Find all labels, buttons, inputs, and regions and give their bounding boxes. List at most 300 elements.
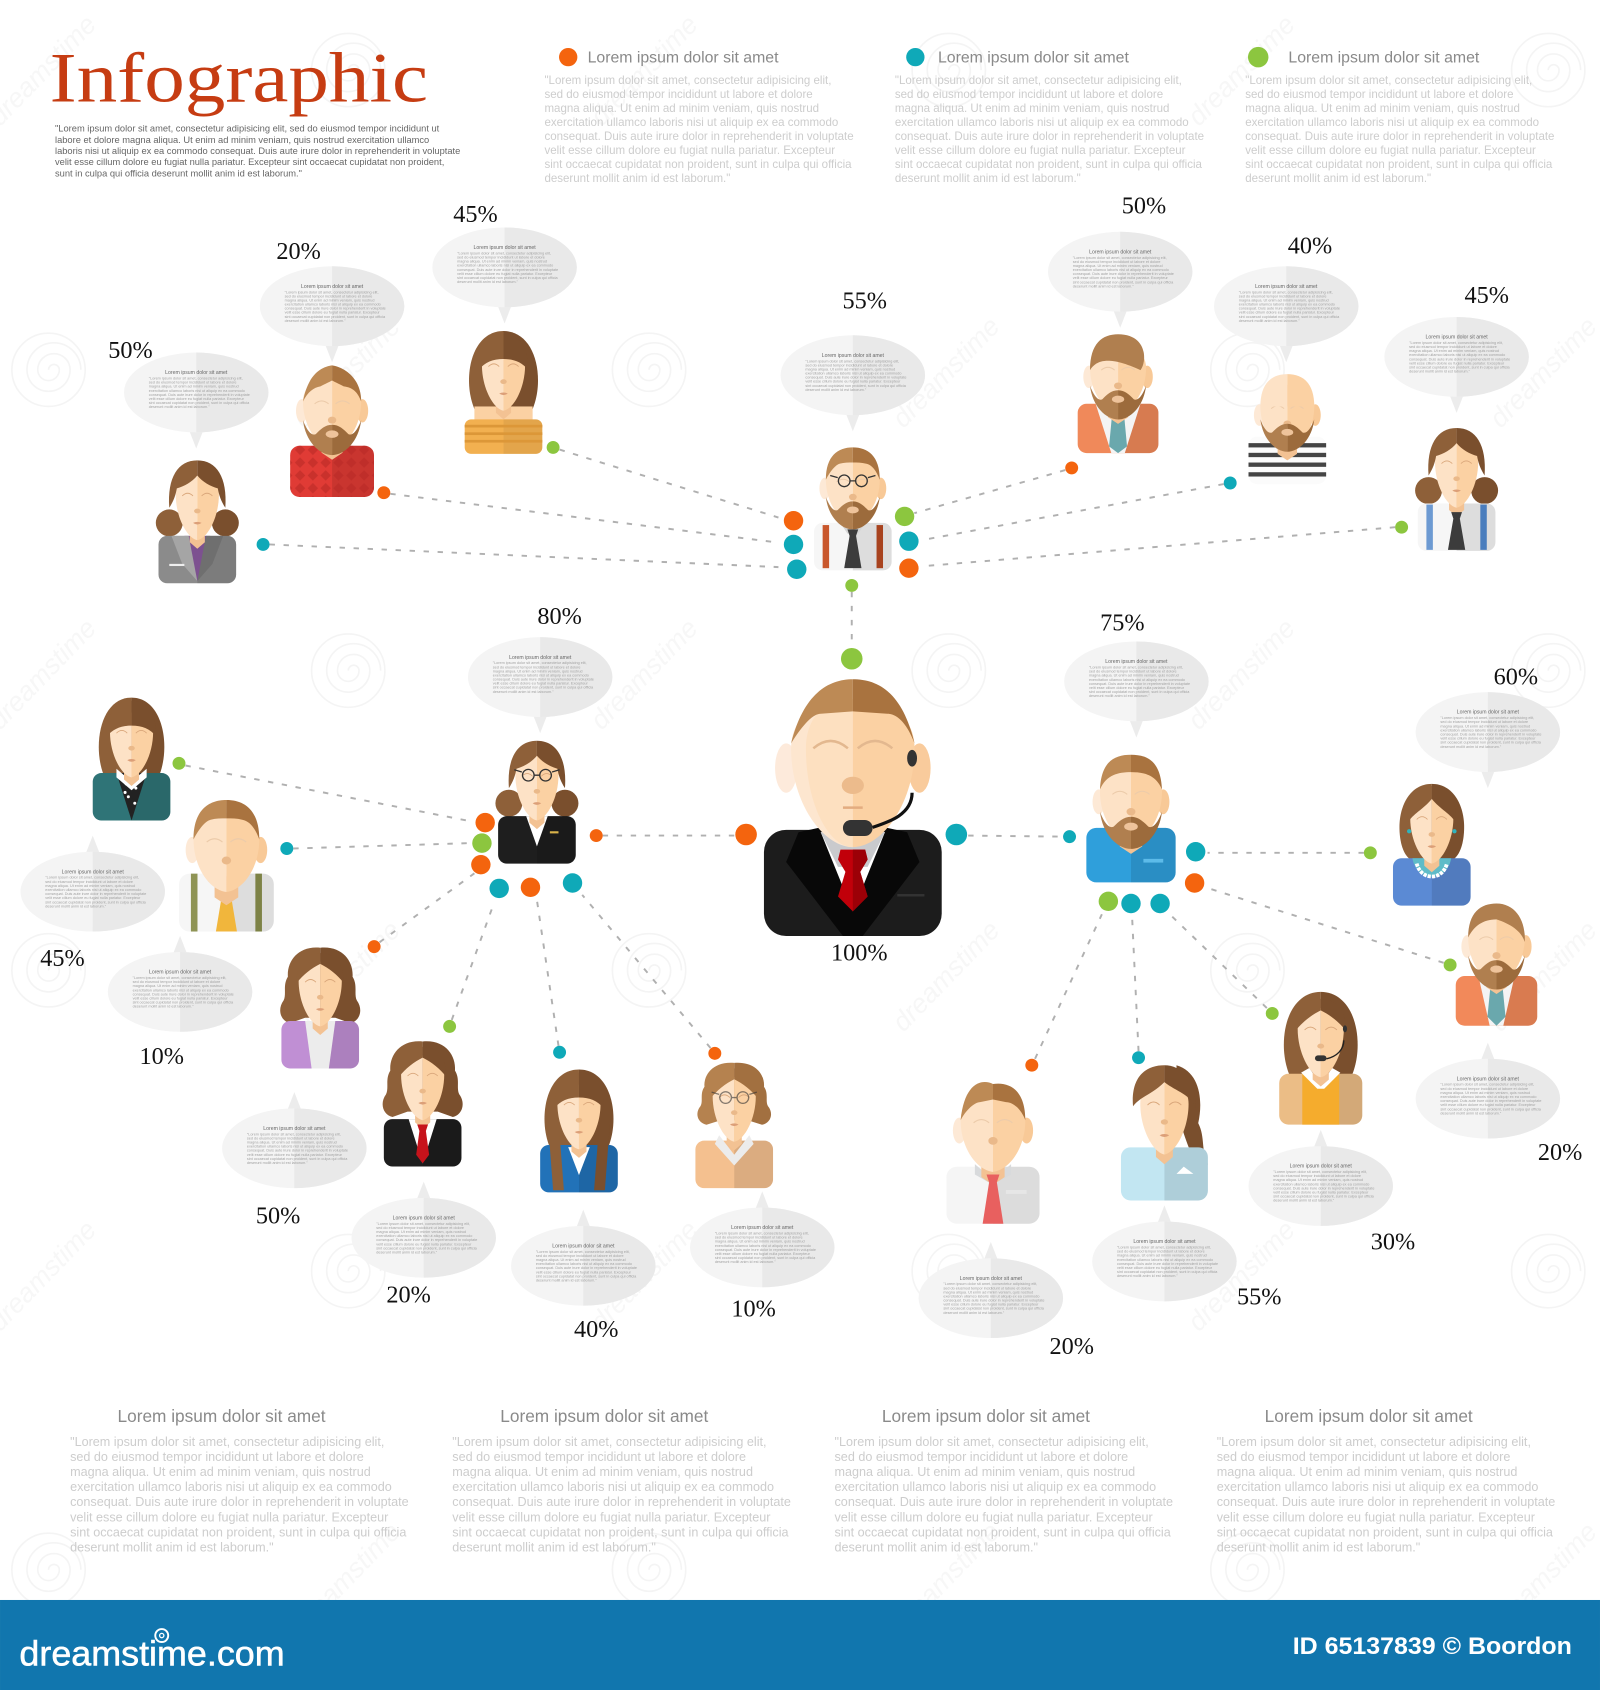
- speech bubble: 10% lower: magna aliqua. Ut enim ad minim veniam, quis nostrud: [715, 1240, 805, 1244]
- watermark pattern: dreamstime: [886, 1517, 1006, 1639]
- speech bubble: 60%: magna aliqua. Ut enim ad minim veniam, quis nostrud: [1440, 724, 1530, 728]
- legend: green: deserunt mollit anim id est laborum.": [1245, 173, 1431, 185]
- speech bubble: 80%: sint occaecat cupidatat non proident, sunt in culpa qui officia: [493, 686, 594, 690]
- speech bubble: 60%: Lorem ipsum dolor sit amet: [1457, 710, 1520, 716]
- percentage labels: 80%: [537, 603, 582, 630]
- speech bubble: 50% man: Lorem ipsum dolor sit amet: [1089, 249, 1152, 255]
- bottom text block 2: "Lorem ipsum dolor sit amet, consectetur adipisicing elit,: [452, 1435, 767, 1449]
- speech bubble: 40%: velit esse cillum dolore eu fugiat nulla pariatur. Excepteur: [536, 1270, 632, 1274]
- speech bubble: 50% woman: exercitation ullamco laboris nisi ut aliquip ex ea commodo: [149, 389, 245, 393]
- avatar: manager with glasses and suspenders: [814, 447, 892, 570]
- speech bubble: 50% man: sed do eiusmod tempor incididunt ut labore et dolore: [1073, 260, 1160, 264]
- legend: green: "Lorem ipsum dolor sit amet, consectetur adipisicing elit,: [1245, 75, 1532, 87]
- speech bubble: 30%: "Lorem ipsum dolor sit amet, consectetur adipisicing elit,: [1273, 1170, 1367, 1174]
- speech bubble: 30%: sint occaecat cupidatat non proident, sunt in culpa qui officia: [1273, 1195, 1375, 1199]
- speech bubble: 50% woman: deserunt mollit anim id est laborum.": [149, 405, 210, 409]
- avatar: woman with pearl necklace: [1393, 784, 1471, 906]
- speech bubble: 45% woman: sint occaecat cupidatat non proident, sunt in culpa qui officia: [457, 276, 558, 280]
- speech bubble: 40%: consequat. Duis aute irure dolor in reprehenderit in voluptate: [536, 1266, 637, 1270]
- speech bubble: 20% lower right: Lorem ipsum dolor sit amet: [960, 1276, 1022, 1282]
- speech bubble: 20% lower left: Lorem ipsum dolor sit amet: [393, 1215, 455, 1221]
- speech bubble: 50% man: "Lorem ipsum dolor sit amet, consectetur adipisicing elit,: [1073, 256, 1167, 260]
- watermark pattern: dreamstime: [287, 311, 406, 433]
- percentage labels: 20%: [386, 1281, 431, 1308]
- speech bubble: 45% woman: "Lorem ipsum dolor sit amet, consectetur adipisicing elit,: [457, 251, 551, 255]
- bottom text block 3: sint occaecat cupidatat non proident, sunt in culpa qui officia: [835, 1525, 1172, 1539]
- speech bubble: 10% left: "Lorem ipsum dolor sit amet, consectetur adipisicing elit,: [133, 976, 226, 980]
- speech bubble: 50% lower left: velit esse cillum dolore eu fugiat nulla pariatur. Excepteur: [247, 1153, 343, 1157]
- percentage labels: 50%: [108, 337, 153, 364]
- speech bubble: 20% lower right: sint occaecat cupidatat non proident, sunt in culpa qui officia: [943, 1307, 1045, 1311]
- speech bubble: 45% woman right: consequat. Duis aute irure dolor in reprehenderit in voluptate: [1409, 357, 1510, 361]
- speech bubble: 40%: sed do eiusmod tempor incididunt ut labore et dolore: [536, 1254, 624, 1258]
- speech bubble: 40% man: sint occaecat cupidatat non proident, sunt in culpa qui officia: [1239, 315, 1340, 319]
- bottom text block 2: Lorem ipsum dolor sit amet: [500, 1406, 709, 1426]
- speech bubble: 20% man: consequat. Duis aute irure dolor in reprehenderit in voluptate: [285, 307, 386, 311]
- speech bubble: 20% lower right: exercitation ullamco laboris nisi ut aliquip ex ea commodo: [943, 1294, 1039, 1298]
- speech bubble: 40%: [511, 1210, 656, 1306]
- speech bubble: 50% man: magna aliqua. Ut enim ad minim veniam, quis nostrud: [1073, 264, 1163, 268]
- bottom text block 1: exercitation ullamco laboris nisi ut aliquip ex ea commodo: [70, 1480, 392, 1494]
- speech bubble: 55% manager: Lorem ipsum dolor sit amet: [822, 353, 884, 359]
- speech bubble: 10% lower: "Lorem ipsum dolor sit amet, consectetur adipisicing elit,: [715, 1231, 809, 1235]
- speech bubble: 30%: [1249, 1130, 1393, 1226]
- legend: teal: [895, 48, 1204, 185]
- avatar: black suit woman with red tie: [383, 1041, 463, 1167]
- watermark pattern: dreamstime: [1484, 915, 1600, 1037]
- speech bubble: 45% woman: [432, 227, 577, 323]
- speech bubble: 80%: deserunt mollit anim id est laborum.": [493, 690, 554, 694]
- speech bubble: 30%: sed do eiusmod tempor incididunt ut labore et dolore: [1273, 1174, 1361, 1178]
- watermark pattern: dreamstime: [584, 9, 704, 131]
- legend: green: exercitation ullamco laboris nisi ut aliquip ex ea commodo: [1245, 117, 1539, 129]
- speech bubble: 50% man: [1048, 232, 1192, 328]
- speech bubble: 20% man: [260, 266, 404, 362]
- legend: green: sed do eiusmod tempor incididunt ut labore et dolore: [1245, 89, 1514, 101]
- bottom text block 1: consequat. Duis aute irure dolor in reprehenderit in voluptate: [70, 1495, 409, 1509]
- legend: orange: [544, 48, 854, 185]
- bottom text block 4: deserunt mollit anim id est laborum.": [1217, 1540, 1420, 1554]
- speech bubble: 45% woman right: exercitation ullamco laboris nisi ut aliquip ex ea commodo: [1409, 353, 1505, 357]
- speech bubble: 50% man: velit esse cillum dolore eu fugiat nulla pariatur. Excepteur: [1073, 276, 1169, 280]
- percentage labels: 50%: [1122, 192, 1166, 219]
- speech bubble: 20% man: magna aliqua. Ut enim ad minim veniam, quis nostrud: [285, 298, 374, 302]
- intro text block: "Lorem ipsum dolor sit amet, consectetur adipisicing elit, sed do eiusmod tempor incididunt ut: [55, 124, 440, 134]
- speech bubble: 50% lower left: consequat. Duis aute irure dolor in reprehenderit in voluptate: [247, 1149, 348, 1153]
- bottom text block 1: magna aliqua. Ut enim ad minim veniam, quis nostrud: [70, 1465, 371, 1479]
- bottom text block 1: Lorem ipsum dolor sit amet: [118, 1406, 326, 1426]
- speech bubble: 55% manager: consequat. Duis aute irure dolor in reprehenderit in voluptate: [805, 376, 907, 380]
- percentage labels: 45%: [1465, 282, 1509, 309]
- legend: green: Lorem ipsum dolor sit amet: [1288, 50, 1480, 67]
- percentage labels: 75%: [1100, 610, 1145, 637]
- percentage labels: 55%: [1237, 1284, 1282, 1311]
- speech bubble: 45% woman: velit esse cillum dolore eu fugiat nulla pariatur. Excepteur: [457, 272, 553, 276]
- speech bubble: 55% manager: exercitation ullamco laboris nisi ut aliquip ex ea commodo: [805, 372, 901, 376]
- speech bubble: 60%: [1416, 692, 1560, 788]
- avatar: purple vest curly woman: [280, 947, 360, 1068]
- bottom text block 4: velit esse cillum dolore eu fugiat nulla pariatur. Excepteur: [1217, 1510, 1535, 1524]
- bottom text block 2: exercitation ullamco laboris nisi ut aliquip ex ea commodo: [452, 1480, 774, 1494]
- connector dots: green: [173, 441, 1457, 1033]
- speech bubble: 50% woman: velit esse cillum dolore eu fugiat nulla pariatur. Excepteur: [149, 397, 245, 401]
- speech bubble: 60%: sint occaecat cupidatat non proident, sunt in culpa qui officia: [1440, 741, 1542, 745]
- avatar: orange jacket man: [1456, 903, 1537, 1026]
- watermark pattern: dreamstime: [1182, 1215, 1301, 1337]
- speech bubble: 20% lower right: "Lorem ipsum dolor sit amet, consectetur adipisicing elit,: [943, 1282, 1037, 1286]
- speech bubble: 75%: "Lorem ipsum dolor sit amet, consectetur adipisicing elit,: [1089, 665, 1183, 669]
- speech bubble: 40% man: sed do eiusmod tempor incididunt ut labore et dolore: [1239, 294, 1327, 298]
- avatar: woman with blue suspenders: [1415, 428, 1498, 551]
- speech bubble: 50% lower left: [222, 1092, 367, 1188]
- speech bubble: 80%: sed do eiusmod tempor incididunt ut labore et dolore: [493, 665, 580, 669]
- avatar: headset woman: [1279, 992, 1362, 1125]
- bottom text block 1: sint occaecat cupidatat non proident, sunt in culpa qui officia: [70, 1525, 407, 1539]
- speech bubble: 10% lower: sed do eiusmod tempor incididunt ut labore et dolore: [715, 1236, 803, 1240]
- speech bubble: 20% lower right: sed do eiusmod tempor incididunt ut labore et dolore: [943, 1286, 1031, 1290]
- watermark pattern: dreamstime: [287, 915, 406, 1037]
- avatar: older woman with glasses: [695, 1063, 773, 1188]
- speech bubble: 50% woman: magna aliqua. Ut enim ad minim veniam, quis nostrud: [149, 385, 239, 389]
- legend: teal: deserunt mollit anim id est laborum.": [895, 173, 1081, 185]
- speech bubble: 40%: exercitation ullamco laboris nisi ut aliquip ex ea commodo: [536, 1262, 632, 1266]
- speech bubble: 55% lower: "Lorem ipsum dolor sit amet, consectetur adipisicing elit,: [1117, 1245, 1211, 1249]
- speech bubble: 55% manager: sed do eiusmod tempor incididunt ut labore et dolore: [805, 363, 893, 367]
- speech bubble: 55% lower: sint occaecat cupidatat non proident, sunt in culpa qui officia: [1117, 1270, 1218, 1274]
- title: Infographic: [50, 39, 428, 117]
- speech bubble: 20% man: Lorem ipsum dolor sit amet: [301, 284, 364, 290]
- legend: orange: exercitation ullamco laboris nisi ut aliquip ex ea commodo: [544, 117, 838, 129]
- speech bubble: 55% lower: exercitation ullamco laboris nisi ut aliquip ex ea commodo: [1117, 1258, 1213, 1262]
- watermark pattern: dreamstime: [1484, 311, 1600, 433]
- speech bubble: 55% lower: sed do eiusmod tempor incididunt ut labore et dolore: [1117, 1250, 1205, 1254]
- speech bubble: 45% woman: magna aliqua. Ut enim ad minim veniam, quis nostrud: [457, 260, 547, 264]
- speech bubble: 20% lower left: consequat. Duis aute irure dolor in reprehenderit in voluptate: [376, 1238, 477, 1242]
- legend: green: consequat. Duis aute irure dolor in reprehenderit in voluptate: [1245, 131, 1554, 143]
- speech bubble: 40% man: [1214, 266, 1358, 362]
- speech bubble: 20% lower left: magna aliqua. Ut enim ad minim veniam, quis nostrud: [376, 1230, 466, 1234]
- intro text block: laboris nisi ut aliquip ex ea commodo consequat. Duis aute irure dolor in reprehenderit in voluptate: [55, 146, 460, 156]
- speech bubble: 60%: exercitation ullamco laboris nisi ut aliquip ex ea commodo: [1440, 728, 1536, 732]
- legend: orange: sed do eiusmod tempor incididunt ut labore et dolore: [544, 89, 813, 101]
- speech bubble: 50% woman: consequat. Duis aute irure dolor in reprehenderit in voluptate: [149, 393, 250, 397]
- speech bubble: 40% man: magna aliqua. Ut enim ad minim veniam, quis nostrud: [1239, 298, 1329, 302]
- speech bubble: 20% right: magna aliqua. Ut enim ad minim veniam, quis nostrud: [1440, 1091, 1530, 1095]
- percentage labels: 10%: [731, 1295, 776, 1322]
- speech bubble: 75%: sed do eiusmod tempor incididunt ut labore et dolore: [1089, 670, 1177, 674]
- bottom text block 2: deserunt mollit anim id est laborum.": [452, 1540, 656, 1554]
- legend: orange: consequat. Duis aute irure dolor in reprehenderit in voluptate: [544, 131, 854, 143]
- speech bubble: 20% lower right: consequat. Duis aute irure dolor in reprehenderit in voluptate: [943, 1299, 1045, 1303]
- speech bubble: 60%: deserunt mollit anim id est laborum.": [1440, 745, 1502, 749]
- speech bubble: 20% right: velit esse cillum dolore eu fugiat nulla pariatur. Excepteur: [1440, 1103, 1536, 1107]
- speech bubble: 50% lower left: "Lorem ipsum dolor sit amet, consectetur adipisicing elit,: [247, 1132, 341, 1136]
- speech bubble: 55% lower: Lorem ipsum dolor sit amet: [1133, 1239, 1196, 1245]
- speech bubble: 45% left: consequat. Duis aute irure dolor in reprehenderit in voluptate: [45, 892, 146, 896]
- bottom text block 2: consequat. Duis aute irure dolor in reprehenderit in voluptate: [452, 1495, 791, 1509]
- speech bubble: 20% right: sed do eiusmod tempor incididunt ut labore et dolore: [1440, 1087, 1528, 1091]
- speech bubble: 50% lower left: deserunt mollit anim id est laborum.": [247, 1161, 308, 1165]
- watermark pattern: dreamstime: [886, 311, 1006, 433]
- speech bubble: 80%: velit esse cillum dolore eu fugiat nulla pariatur. Excepteur: [493, 682, 589, 686]
- speech bubble: 10% left: Lorem ipsum dolor sit amet: [149, 970, 212, 976]
- speech bubble: 30%: velit esse cillum dolore eu fugiat nulla pariatur. Excepteur: [1273, 1191, 1369, 1195]
- speech bubble: 20% lower right: [919, 1242, 1063, 1338]
- percentage labels: 30%: [1371, 1229, 1415, 1256]
- speech bubble: 10% left: exercitation ullamco laboris nisi ut aliquip ex ea commodo: [133, 988, 229, 992]
- speech bubble: 40% man: Lorem ipsum dolor sit amet: [1255, 284, 1318, 290]
- speech bubble: 50% woman: sint occaecat cupidatat non proident, sunt in culpa qui officia: [149, 401, 250, 405]
- watermark pattern: dreamstime: [1484, 1517, 1600, 1639]
- bottom text block 1: sed do eiusmod tempor incididunt ut labore et dolore: [70, 1450, 364, 1464]
- speech bubble: 20% man: deserunt mollit anim id est laborum.": [285, 319, 346, 323]
- speech bubble: 10% left: consequat. Duis aute irure dolor in reprehenderit in voluptate: [133, 992, 234, 996]
- speech bubble: 20% right: sint occaecat cupidatat non proident, sunt in culpa qui officia: [1440, 1107, 1542, 1111]
- speech bubble: 50% lower left: exercitation ullamco laboris nisi ut aliquip ex ea commodo: [247, 1145, 343, 1149]
- speech bubble: 30%: magna aliqua. Ut enim ad minim veniam, quis nostrud: [1273, 1178, 1363, 1182]
- speech bubble: 10% lower: deserunt mollit anim id est laborum.": [715, 1260, 776, 1264]
- speech bubble: 75%: sint occaecat cupidatat non proident, sunt in culpa qui officia: [1089, 690, 1190, 694]
- avatar: yellow tie man: [179, 800, 274, 932]
- speech bubble: 40%: "Lorem ipsum dolor sit amet, consectetur adipisicing elit,: [536, 1250, 630, 1254]
- speech bubble: 40%: magna aliqua. Ut enim ad minim veniam, quis nostrud: [536, 1258, 626, 1262]
- speech bubble: 40%: deserunt mollit anim id est laborum.": [536, 1278, 597, 1282]
- speech bubble: 50% man: deserunt mollit anim id est laborum.": [1073, 284, 1134, 288]
- speech bubble: 10% left: magna aliqua. Ut enim ad minim veniam, quis nostrud: [133, 984, 222, 988]
- percentage labels: 100%: [831, 940, 888, 967]
- watermark pattern: dreamstime: [886, 915, 1006, 1037]
- speech bubble: 50% woman: [124, 353, 268, 449]
- avatar: orange striped top woman: [465, 331, 542, 454]
- speech bubble: 20% right: [1416, 1043, 1560, 1139]
- legend: teal: exercitation ullamco laboris nisi ut aliquip ex ea commodo: [895, 117, 1189, 129]
- bottom text block 3: magna aliqua. Ut enim ad minim veniam, quis nostrud: [835, 1465, 1135, 1479]
- speech bubble: 50% lower left: Lorem ipsum dolor sit amet: [263, 1126, 326, 1132]
- bottom text block 3: exercitation ullamco laboris nisi ut aliquip ex ea commodo: [835, 1480, 1156, 1494]
- speech bubble: 40% man: consequat. Duis aute irure dolor in reprehenderit in voluptate: [1239, 307, 1340, 311]
- legend: teal: sint occaecat cupidatat non proident, sunt in culpa qui officia: [895, 159, 1203, 171]
- speech bubble: 45% woman: exercitation ullamco laboris nisi ut aliquip ex ea commodo: [457, 264, 553, 268]
- speech bubble: 80%: "Lorem ipsum dolor sit amet, consectetur adipisicing elit,: [493, 661, 587, 665]
- legend: orange: magna aliqua. Ut enim ad minim veniam, quis nostrud: [544, 103, 819, 115]
- speech bubble: 55% manager: magna aliqua. Ut enim ad minim veniam, quis nostrud: [805, 367, 895, 371]
- speech bubble: 20% lower right: velit esse cillum dolore eu fugiat nulla pariatur. Excepteur: [943, 1303, 1039, 1307]
- speech bubble: 60%: sed do eiusmod tempor incididunt ut labore et dolore: [1440, 720, 1528, 724]
- legend: orange: velit esse cillum dolore eu fugiat nulla pariatur. Excepteur: [544, 145, 835, 157]
- speech bubble: 45% woman right: Lorem ipsum dolor sit amet: [1425, 335, 1488, 341]
- legend: orange: Lorem ipsum dolor sit amet: [588, 50, 779, 67]
- speech bubble: 30%: consequat. Duis aute irure dolor in reprehenderit in voluptate: [1273, 1186, 1374, 1190]
- bottom text block 4: exercitation ullamco laboris nisi ut aliquip ex ea commodo: [1217, 1480, 1538, 1494]
- bottom text block 3: velit esse cillum dolore eu fugiat nulla pariatur. Excepteur: [835, 1510, 1153, 1524]
- speech bubble: 80%: magna aliqua. Ut enim ad minim veniam, quis nostrud: [493, 669, 583, 673]
- watermark pattern: dreamstime: [1182, 9, 1301, 131]
- avatar: blue jacket long hair woman: [540, 1070, 618, 1192]
- legend: green: sint occaecat cupidatat non proident, sunt in culpa qui officia: [1245, 159, 1553, 171]
- central avatar: agent with headset: [764, 679, 942, 936]
- dashed connector lines: [185, 450, 1444, 1059]
- bottom text block 2: sed do eiusmod tempor incididunt ut labore et dolore: [452, 1450, 746, 1464]
- avatar: grey jacket woman: [156, 460, 239, 583]
- watermark pattern: dreamstime: [584, 1215, 704, 1337]
- bottom text block 4: sed do eiusmod tempor incididunt ut labore et dolore: [1217, 1450, 1510, 1464]
- speech bubble: 10% left: velit esse cillum dolore eu fugiat nulla pariatur. Excepteur: [133, 996, 228, 1000]
- speech bubble: 20% man: exercitation ullamco laboris nisi ut aliquip ex ea commodo: [285, 303, 381, 307]
- speech bubble: 40% man: "Lorem ipsum dolor sit amet, consectetur adipisicing elit,: [1239, 290, 1333, 294]
- speech bubble: 55% lower: consequat. Duis aute irure dolor in reprehenderit in voluptate: [1117, 1262, 1218, 1266]
- watermark pattern: dreamstime: [287, 1517, 406, 1639]
- avatar: red shirt bearded man: [290, 365, 374, 497]
- speech bubble: 50% woman: "Lorem ipsum dolor sit amet, consectetur adipisicing elit,: [149, 377, 243, 381]
- speech bubble: 45% left: deserunt mollit anim id est laborum.": [45, 904, 107, 908]
- speech bubble: 45% left: [20, 836, 165, 932]
- speech bubble: 10% lower: consequat. Duis aute irure dolor in reprehenderit in voluptate: [715, 1248, 816, 1252]
- avatar: teal jacket woman: [93, 698, 170, 820]
- bottom text block 2: [452, 1406, 791, 1554]
- bottom text block 4: Lorem ipsum dolor sit amet: [1265, 1406, 1473, 1426]
- percentage labels: 20%: [1049, 1333, 1094, 1360]
- bottom text block 4: [1217, 1406, 1555, 1554]
- speech bubble: 10% lower: sint occaecat cupidatat non proident, sunt in culpa qui officia: [715, 1256, 816, 1260]
- bottom text block 3: deserunt mollit anim id est laborum.": [835, 1540, 1038, 1554]
- legend: teal: "Lorem ipsum dolor sit amet, consectetur adipisicing elit,: [895, 75, 1182, 87]
- bottom text block 3: Lorem ipsum dolor sit amet: [882, 1406, 1090, 1426]
- speech bubble: 50% man: sint occaecat cupidatat non proident, sunt in culpa qui officia: [1073, 280, 1174, 284]
- speech bubble: 55% manager: [781, 335, 925, 431]
- speech bubble: 30%: deserunt mollit anim id est laborum.": [1273, 1199, 1335, 1203]
- speech bubble: 60%: "Lorem ipsum dolor sit amet, consectetur adipisicing elit,: [1440, 716, 1534, 720]
- speech bubble: 20% lower left: sed do eiusmod tempor incididunt ut labore et dolore: [376, 1226, 464, 1230]
- speech bubble: 55% manager: "Lorem ipsum dolor sit amet, consectetur adipisicing elit,: [805, 359, 899, 363]
- speech bubble: 20% right: exercitation ullamco laboris nisi ut aliquip ex ea commodo: [1440, 1095, 1536, 1099]
- speech bubble: 55% manager: deserunt mollit anim id est laborum.": [805, 388, 867, 392]
- percentage labels: 20%: [1538, 1139, 1582, 1166]
- connector dots: teal: [257, 477, 1237, 1064]
- speech bubble: 40% man: velit esse cillum dolore eu fugiat nulla pariatur. Excepteur: [1239, 311, 1335, 315]
- speech bubble: 20% lower right: deserunt mollit anim id est laborum.": [943, 1311, 1005, 1315]
- speech bubble: 75%: [1064, 641, 1209, 737]
- speech bubble: 75%: Lorem ipsum dolor sit amet: [1105, 659, 1168, 665]
- speech bubble: 45% left: Lorem ipsum dolor sit amet: [62, 869, 124, 875]
- speech bubble: 80%: Lorem ipsum dolor sit amet: [509, 655, 572, 661]
- speech bubble: 80%: consequat. Duis aute irure dolor in reprehenderit in voluptate: [493, 678, 594, 682]
- speech bubble: 30%: exercitation ullamco laboris nisi ut aliquip ex ea commodo: [1273, 1182, 1369, 1186]
- footer band: dreamstime.com: [19, 1634, 285, 1674]
- speech bubble: 55% lower: velit esse cillum dolore eu fugiat nulla pariatur. Excepteur: [1117, 1266, 1213, 1270]
- percentage labels: 10%: [140, 1043, 184, 1070]
- bottom text block 4: "Lorem ipsum dolor sit amet, consectetur adipisicing elit,: [1217, 1435, 1531, 1449]
- speech bubble: 60%: consequat. Duis aute irure dolor in reprehenderit in voluptate: [1440, 733, 1542, 737]
- percentage labels: 40%: [1288, 232, 1332, 259]
- legend: green: magna aliqua. Ut enim ad minim veniam, quis nostrud: [1245, 103, 1520, 115]
- percentage labels: 45%: [453, 201, 498, 228]
- intro text block: sunt in culpa qui officia deserunt mollit anim id est laborum.": [55, 168, 302, 178]
- legend: green: velit esse cillum dolore eu fugiat nulla pariatur. Excepteur: [1245, 145, 1536, 157]
- speech bubble: 75%: magna aliqua. Ut enim ad minim veniam, quis nostrud: [1089, 674, 1179, 678]
- speech bubble: 80%: exercitation ullamco laboris nisi ut aliquip ex ea commodo: [493, 673, 589, 677]
- footer band: ID 65137839 © Boordon: [1293, 1634, 1572, 1660]
- avatar: light blue shirt woman: [1121, 1065, 1208, 1200]
- connector dots: orange: [368, 461, 1204, 1072]
- footer band: [0, 1600, 1600, 1690]
- percentage labels: [40, 192, 1582, 1360]
- speech bubble: 20% lower right: magna aliqua. Ut enim ad minim veniam, quis nostrud: [943, 1290, 1033, 1294]
- bottom text block 3: sed do eiusmod tempor incididunt ut labore et dolore: [835, 1450, 1128, 1464]
- speech bubble: 20% man: sed do eiusmod tempor incididunt ut labore et dolore: [285, 294, 372, 298]
- legend: teal: magna aliqua. Ut enim ad minim veniam, quis nostrud: [895, 103, 1169, 115]
- speech bubble: 45% woman right: sed do eiusmod tempor incididunt ut labore et dolore: [1409, 345, 1497, 349]
- speech bubble: 20% lower left: exercitation ullamco laboris nisi ut aliquip ex ea commodo: [376, 1234, 472, 1238]
- speech bubble: 20% man: "Lorem ipsum dolor sit amet, consectetur adipisicing elit,: [285, 290, 379, 294]
- speech bubble: 45% woman right: velit esse cillum dolore eu fugiat nulla pariatur. Excepteur: [1409, 361, 1505, 365]
- speech bubble: 20% lower left: "Lorem ipsum dolor sit amet, consectetur adipisicing elit,: [376, 1222, 470, 1226]
- legend: teal: consequat. Duis aute irure dolor in reprehenderit in voluptate: [895, 131, 1204, 143]
- speech bubble: 50% lower left: magna aliqua. Ut enim ad minim veniam, quis nostrud: [247, 1140, 337, 1144]
- bottom text block 4: magna aliqua. Ut enim ad minim veniam, quis nostrud: [1217, 1465, 1517, 1479]
- bottom text block 4: consequat. Duis aute irure dolor in reprehenderit in voluptate: [1217, 1495, 1555, 1509]
- intro text block: labore et dolore magna aliqua. Ut enim ad minim veniam, quis nostrud exercitation ullamco: [55, 135, 429, 145]
- legend: teal: velit esse cillum dolore eu fugiat nulla pariatur. Excepteur: [895, 145, 1186, 157]
- speech bubble: 50% man: exercitation ullamco laboris nisi ut aliquip ex ea commodo: [1073, 268, 1169, 272]
- speech bubble: 40% man: deserunt mollit anim id est laborum.": [1239, 319, 1300, 323]
- bottom text block 2: velit esse cillum dolore eu fugiat nulla pariatur. Excepteur: [452, 1510, 771, 1524]
- speech bubble: 10% lower: exercitation ullamco laboris nisi ut aliquip ex ea commodo: [715, 1244, 811, 1248]
- speech bubble: 45% left: sed do eiusmod tempor incididunt ut labore et dolore: [45, 880, 133, 884]
- speech bubble: 75%: exercitation ullamco laboris nisi ut aliquip ex ea commodo: [1089, 678, 1185, 682]
- speech bubble: 45% woman: deserunt mollit anim id est laborum.": [457, 280, 519, 284]
- speech bubble: 45% woman right: deserunt mollit anim id est laborum.": [1409, 370, 1471, 374]
- percentage labels: 55%: [842, 287, 887, 314]
- watermark pattern: dreamstime: [584, 613, 704, 735]
- speech bubble: 75%: consequat. Duis aute irure dolor in reprehenderit in voluptate: [1089, 682, 1190, 686]
- speech bubble: 55% lower: deserunt mollit anim id est laborum.": [1117, 1274, 1178, 1278]
- avatar: bald man in striped shirt: [1249, 374, 1326, 484]
- percentage labels: 45%: [40, 945, 85, 972]
- speech bubble: 45% left: velit esse cillum dolore eu fugiat nulla pariatur. Excepteur: [45, 896, 141, 900]
- legend: green: [1245, 47, 1554, 185]
- speech bubble: 40% man: exercitation ullamco laboris nisi ut aliquip ex ea commodo: [1239, 303, 1335, 307]
- percentage labels: 50%: [256, 1203, 300, 1230]
- bottom text block 3: [835, 1406, 1173, 1554]
- legend: orange: sint occaecat cupidatat non proident, sunt in culpa qui officia: [544, 159, 852, 171]
- speech bubble: 20% lower left: sint occaecat cupidatat non proident, sunt in culpa qui officia: [376, 1246, 478, 1250]
- speech bubble: 40%: sint occaecat cupidatat non proident, sunt in culpa qui officia: [536, 1274, 637, 1278]
- speech bubble: 20% lower left: deserunt mollit anim id est laborum.": [376, 1250, 438, 1254]
- bottom text block 1: [70, 1406, 409, 1554]
- percentage labels: 60%: [1494, 664, 1538, 691]
- speech bubble: 45% woman right: "Lorem ipsum dolor sit amet, consectetur adipisicing elit,: [1409, 341, 1503, 345]
- speech bubble: 45% woman right: [1384, 317, 1529, 413]
- speech bubble: 45% woman right: magna aliqua. Ut enim ad minim veniam, quis nostrud: [1409, 349, 1499, 353]
- avatar: white shirt red tie man: [946, 1082, 1040, 1224]
- percentage labels: 40%: [574, 1316, 618, 1343]
- speech bubble: 75%: velit esse cillum dolore eu fugiat nulla pariatur. Excepteur: [1089, 686, 1185, 690]
- intro text block: [55, 124, 460, 178]
- speech bubble: 50% woman: Lorem ipsum dolor sit amet: [165, 370, 228, 376]
- intro text block: velit esse cillum dolore eu fugiat nulla pariatur. Excepteur sint occaecat cupidatat non proident,: [55, 157, 444, 167]
- avatar: blue shirt bearded man: [1086, 755, 1176, 882]
- legend: orange: deserunt mollit anim id est laborum.": [544, 173, 730, 185]
- speech bubble: 75%: deserunt mollit anim id est laborum.": [1089, 694, 1150, 698]
- speech bubble: 50% lower left: sed do eiusmod tempor incididunt ut labore et dolore: [247, 1136, 335, 1140]
- speech bubble: 10% left: [108, 936, 252, 1032]
- bottom text block 4: sint occaecat cupidatat non proident, sunt in culpa qui officia: [1217, 1525, 1554, 1539]
- speech bubble: 55% manager: velit esse cillum dolore eu fugiat nulla pariatur. Excepteur: [805, 380, 901, 384]
- speech bubble: 45% woman right: sint occaecat cupidatat non proident, sunt in culpa qui officia: [1409, 366, 1510, 370]
- bottom text block 1: "Lorem ipsum dolor sit amet, consectetur adipisicing elit,: [70, 1435, 384, 1449]
- speech bubble: 55% manager: sint occaecat cupidatat non proident, sunt in culpa qui officia: [805, 384, 907, 388]
- speech bubble: 45% left: exercitation ullamco laboris nisi ut aliquip ex ea commodo: [45, 888, 141, 892]
